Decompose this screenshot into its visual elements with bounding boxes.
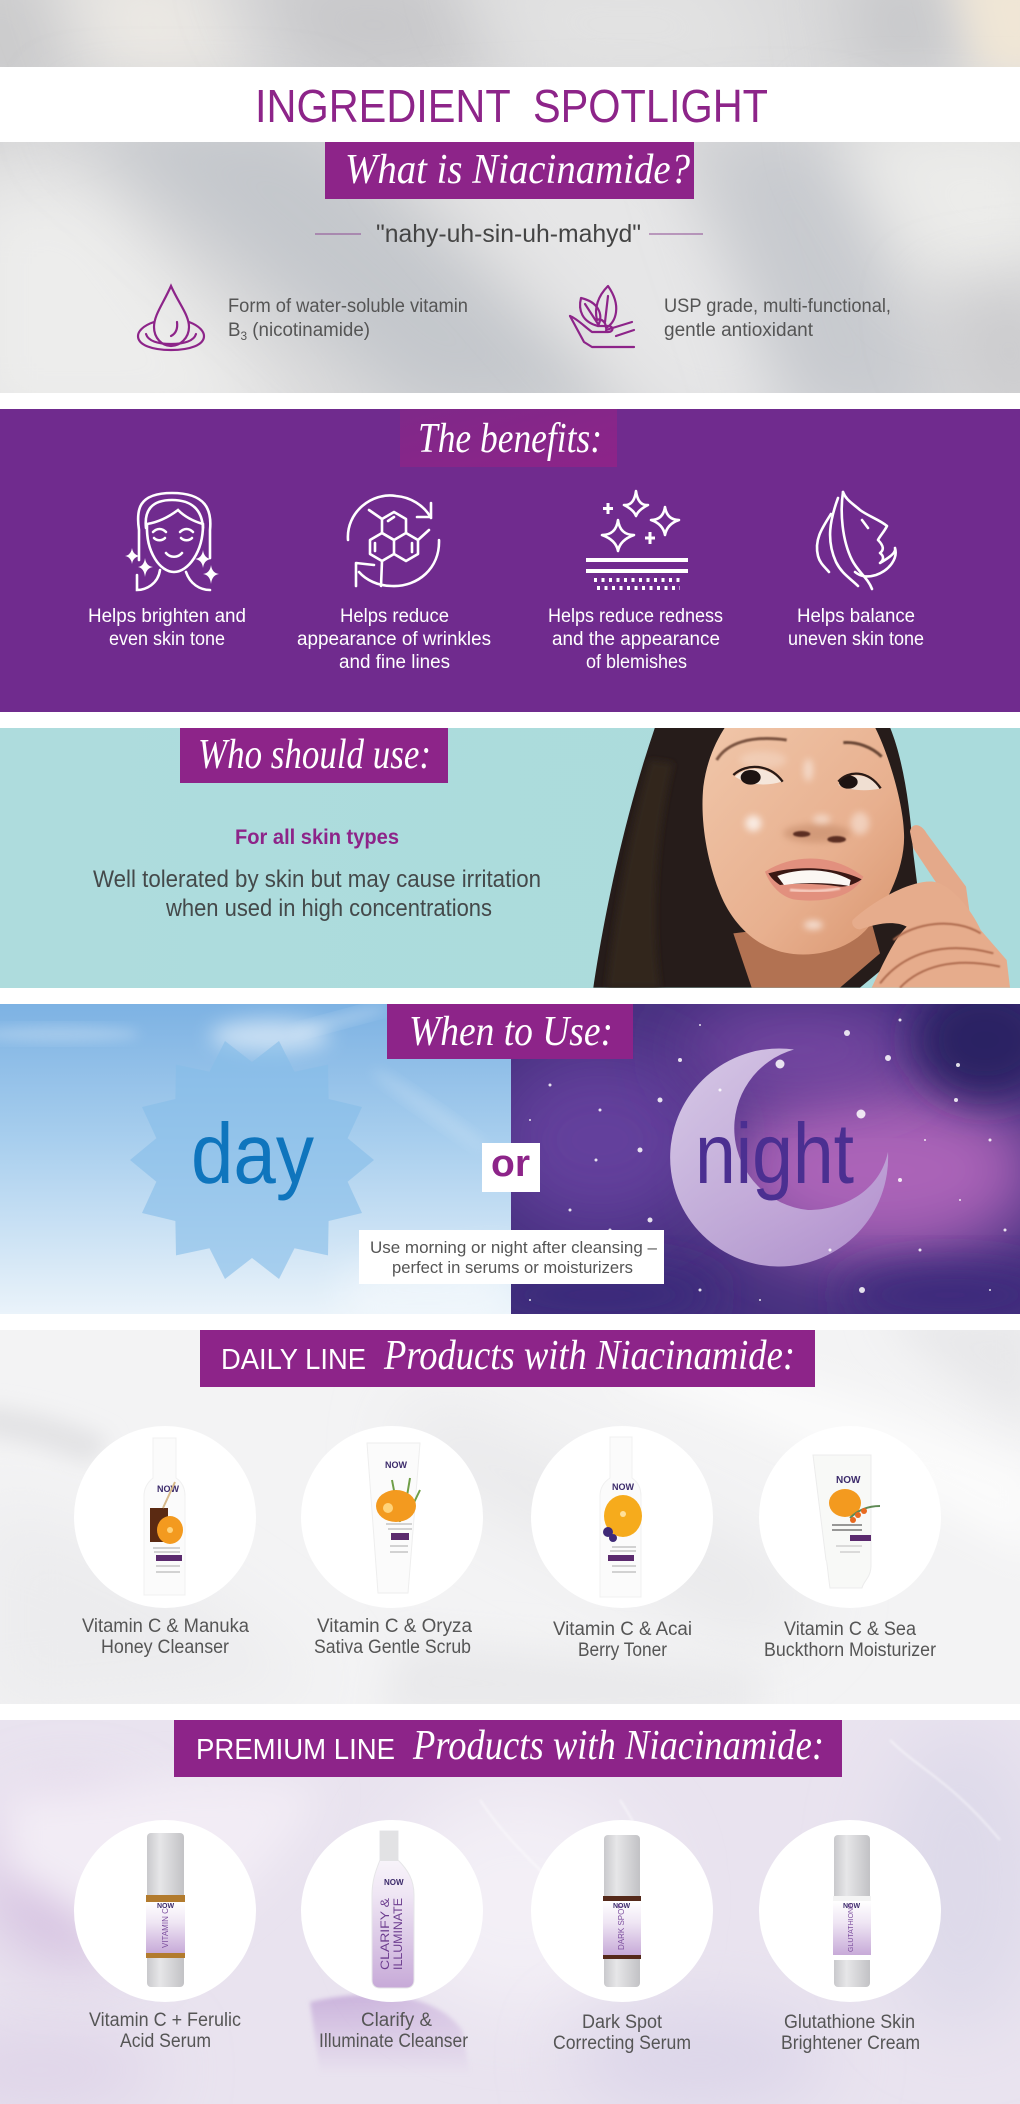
text: well tolerated: when used in high concentrations bbox=[165, 895, 492, 922]
text: USP grade: USP grade, multi-functional, bbox=[664, 296, 891, 317]
product: clarify and illuminate cleanser: CLARIFY & bbox=[378, 1898, 392, 1970]
icon: glowing face bbox=[125, 493, 219, 590]
text: day: day bbox=[191, 1107, 314, 1202]
product: vitamin c and oryza sativa scrub: NOW bbox=[385, 1460, 408, 1470]
product: clarify and illuminate cleanser: NOW bbox=[384, 1878, 404, 1887]
product: vitamin c and manuka honey cleanser: NOW bbox=[157, 1484, 180, 1494]
heading: what is niacinamide: What is Niacinamide? bbox=[345, 147, 690, 193]
text: for all skin types: For all skin types bbox=[235, 826, 399, 849]
label: manuka honey cleanser bbox=[82, 1616, 249, 1658]
icon: water drop bbox=[138, 286, 204, 350]
product: dark spot correcting serum bbox=[531, 1820, 713, 2002]
panel: what is niacinamide silk background bbox=[0, 0, 1020, 393]
text: USP grade bbox=[664, 296, 891, 341]
product: vitamin c and ferulic acid serum: NOW bbox=[157, 1903, 174, 1910]
product: vitamin c and ferulic acid serum bbox=[74, 1820, 256, 2002]
callout: use morning or night bbox=[359, 1230, 664, 1284]
heading: premium line products: Products with Niacinamide: bbox=[412, 1723, 824, 1769]
label: dark spot correcting serum: Dark Spot bbox=[582, 2012, 663, 2033]
product: clarify and illuminate cleanser: ILLUMINATE bbox=[391, 1898, 405, 1970]
heading: the benefits bbox=[400, 409, 617, 467]
panel: premium line bbox=[0, 1720, 1020, 2104]
label: sea buckthorn moisturizer: Buckthorn Moisturizer bbox=[764, 1640, 937, 1661]
text: USP grade: gentle antioxidant bbox=[664, 320, 814, 341]
label: manuka honey cleanser: Vitamin C & Manuka bbox=[82, 1616, 249, 1637]
label: ferulic acid serum bbox=[89, 2010, 241, 2052]
stars bbox=[529, 1018, 1006, 1301]
text: wrinkles: and fine lines bbox=[339, 652, 450, 673]
product: vitamin c and manuka honey cleanser bbox=[74, 1426, 256, 1608]
text: water-soluble vitamin: 3 bbox=[241, 329, 247, 343]
icon: crescent moon bbox=[670, 1048, 888, 1266]
label: ferulic acid serum: Acid Serum bbox=[120, 2031, 211, 2052]
text: balance: Helps balance bbox=[797, 606, 915, 627]
product: glutathione skin brightener cream: NOW bbox=[843, 1903, 860, 1910]
label: sea buckthorn moisturizer: Vitamin C & Sea bbox=[784, 1619, 916, 1640]
text: redness: and the appearance bbox=[552, 629, 720, 650]
heading: premium line products: PREMIUM LINE bbox=[196, 1734, 395, 1766]
product: glutathione skin brightener cream: GLUTATHIONE bbox=[848, 1903, 855, 1952]
product: dark spot correcting serum: DARK SPOT bbox=[617, 1904, 626, 1950]
label: glutathione skin brightener cream: Glutathione Skin bbox=[784, 2012, 915, 2033]
text: well tolerated bbox=[93, 866, 541, 922]
title band bbox=[0, 67, 1020, 142]
text: wrinkles bbox=[297, 606, 491, 673]
icon: face profile bbox=[817, 492, 896, 589]
text: wrinkles: appearance of wrinkles bbox=[297, 629, 491, 650]
label: acai berry toner: Berry Toner bbox=[578, 1640, 668, 1661]
heading: premium line products bbox=[174, 1720, 842, 1777]
callout: use morning or night: Use morning or night after cleansing – bbox=[370, 1239, 658, 1257]
label: dark spot correcting serum bbox=[553, 2012, 691, 2054]
label: oryza sativa gentle scrub bbox=[314, 1618, 472, 1653]
panel: who should use bbox=[0, 727, 1020, 988]
product: vitamin c and oryza sativa scrub bbox=[301, 1426, 483, 1608]
product: glutathione skin brightener cream bbox=[759, 1820, 941, 2002]
product: clarify and illuminate cleanser bbox=[301, 1820, 483, 2002]
label: oryza sativa gentle scrub: Vitamin C & Oryza bbox=[317, 1616, 472, 1637]
heading: daily line products bbox=[200, 1330, 815, 1387]
product: vitamin c and sea buckthorn moisturizer bbox=[759, 1426, 941, 1608]
product: dark spot correcting serum: NOW bbox=[613, 1903, 630, 1910]
heading: daily line products: Products with Niacinamide: bbox=[383, 1333, 795, 1379]
icon: molecule with arrows bbox=[348, 495, 439, 586]
text: redness: of blemishes bbox=[586, 652, 687, 673]
product: vitamin c and acai berry toner bbox=[531, 1426, 713, 1608]
badge: or bbox=[482, 1143, 540, 1192]
heading: who should use: Who should use: bbox=[198, 732, 431, 778]
panel: night side bbox=[511, 1004, 1020, 1314]
text: water-soluble vitamin: Form of water-soluble vitamin bbox=[228, 296, 468, 317]
label: dark spot correcting serum: Correcting Serum bbox=[553, 2033, 691, 2054]
text: balance bbox=[788, 606, 924, 650]
label: clarify and illuminate cleanser: Illuminate Cleanser bbox=[319, 2031, 469, 2052]
panel: daily line bbox=[0, 1310, 1020, 1720]
badge: or: or bbox=[491, 1143, 530, 1185]
label: ferulic acid serum: Vitamin C + Ferulic bbox=[89, 2010, 241, 2031]
title: INGREDIENT SPOTLIGHT bbox=[255, 80, 768, 132]
label: sea buckthorn moisturizer bbox=[765, 1621, 936, 1656]
text: brighten: Helps brighten and bbox=[88, 606, 246, 627]
panel: benefits bbox=[0, 409, 1020, 712]
text: brighten: even skin tone bbox=[109, 629, 225, 650]
icon: sparkles over skin layers bbox=[586, 491, 688, 588]
text: well tolerated: Well tolerated by skin but may cause irritation bbox=[93, 866, 541, 893]
label: clarify and illuminate cleanser bbox=[319, 2010, 469, 2052]
label: clarify and illuminate cleanser: Clarify & bbox=[361, 2010, 432, 2031]
callout: use morning or night: perfect in serums or moisturizers bbox=[392, 1259, 633, 1277]
text: water-soluble vitamin bbox=[228, 296, 468, 343]
icon: sun burst bbox=[130, 1041, 374, 1279]
product: vitamin c and sea buckthorn moisturizer: NOW bbox=[836, 1475, 861, 1486]
text: night: night bbox=[695, 1107, 854, 1202]
icon: hand with leaves bbox=[570, 286, 634, 347]
label: glutathione skin brightener cream: Brightener Cream bbox=[781, 2033, 920, 2054]
heading: daily line products: DAILY LINE bbox=[221, 1344, 366, 1376]
product: vitamin c and acai berry toner: NOW bbox=[612, 1482, 634, 1492]
label: acai berry toner bbox=[553, 1619, 692, 1661]
label: glutathione skin brightener cream bbox=[781, 2012, 920, 2054]
text: brighten bbox=[88, 606, 246, 650]
text: wrinkles: Helps reduce bbox=[340, 606, 449, 627]
panel: day side bbox=[0, 1001, 511, 1314]
pronunciation: "nahy-uh-sin-uh-mahyd" bbox=[376, 220, 641, 248]
label: manuka honey cleanser: Honey Cleanser bbox=[101, 1637, 230, 1658]
text: water-soluble vitamin: (nicotinamide) bbox=[247, 320, 370, 341]
text: balance: uneven skin tone bbox=[788, 629, 924, 650]
text: water-soluble vitamin: B bbox=[228, 320, 241, 341]
label: oryza sativa gentle scrub: Sativa Gentle Scrub bbox=[314, 1637, 471, 1658]
label: acai berry toner: Vitamin C & Acai bbox=[553, 1619, 692, 1640]
product: vitamin c and ferulic acid serum: VITAMIN C bbox=[161, 1908, 170, 1948]
photo: smiling woman bbox=[593, 727, 1010, 988]
text: redness: Helps reduce redness bbox=[548, 606, 723, 627]
heading: when to use: When to Use: bbox=[409, 1009, 613, 1055]
heading: the benefits: The benefits: bbox=[418, 416, 602, 462]
text: redness bbox=[548, 606, 723, 673]
